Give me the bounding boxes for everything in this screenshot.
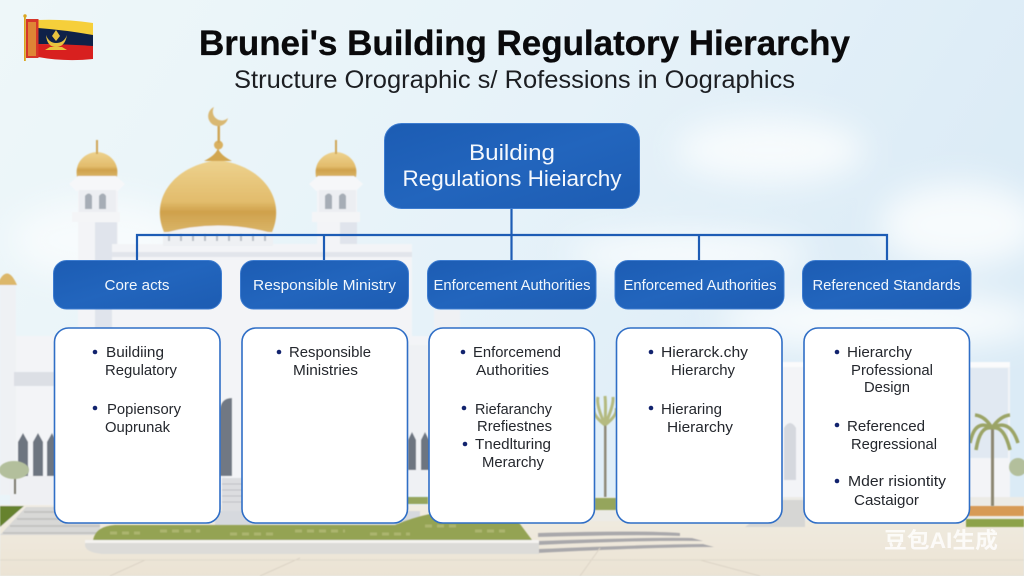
panel: core acts: Ouprunak [105,419,170,436]
panel: core acts: Popiensory [107,401,181,418]
panel: enforcement authorities: Authorities [476,362,549,379]
panel: core acts [54,328,220,523]
panel: core acts: Buildiing [106,344,164,361]
header: Core acts: Core acts [104,277,170,294]
root box: Building Regulations Hierarchy: Building [469,140,555,165]
right minaret top [309,140,363,222]
flag of Brunei [23,14,93,61]
watermark: 豆包AI生成 [884,528,998,553]
clouds [10,118,1024,350]
panel: referenced standards: Mder risiontity [848,473,947,490]
header: Referenced Standards: Referenced Standards [812,277,960,294]
header: Enforced Authorities: Enforcemed Authorities [624,277,776,294]
panel: enforced authorities: Hierarchy [671,362,735,379]
panel: referenced standards: Design [864,379,910,396]
panel: enforced authorities: Hierarchy [667,419,734,436]
subtitle: Structure Orographic s/ Rofessions in Oographics [234,66,795,94]
left minaret top [69,140,125,222]
header: Enforcement Authorities: Enforcement Authorities [434,277,590,294]
panel: enforcement authorities [429,328,594,523]
mosque building [0,190,1010,506]
header: Core acts [54,260,222,309]
panel: referenced standards: Castaigor [854,492,919,509]
panel: referenced standards: Referenced [847,418,925,435]
root box: Building Regulations Hierarchy: Regulations Hieiarchy [402,166,622,191]
panel: enforcement authorities: Merarchy [482,454,544,471]
header: Enforced Authorities [615,260,784,309]
panel: referenced standards [804,328,970,523]
root box: Building Regulations Hierarchy [384,124,640,208]
header: Referenced Standards [802,260,971,309]
header: Responsible Ministry: Responsible Ministry [253,277,397,294]
title: Brunei's Building Regulatory Hierarchy [199,24,851,63]
panel: core acts: Regulatory [105,362,177,379]
panel: responsible ministries: Ministries [293,362,358,379]
panel: enforced authorities: Hierarck.chy [661,344,749,361]
palm trees and small tree [0,396,1024,506]
hedge and planter [85,497,1024,554]
panel: referenced standards: Professional [851,362,933,379]
panel: enforced authorities: Hieraring [661,401,722,418]
panel: enforcement authorities: Riefaranchy [475,401,552,418]
golden main dome [160,107,276,233]
panel: enforced authorities [616,328,782,523]
header: Enforcement Authorities [428,260,596,309]
header: Responsible Ministry [240,260,408,309]
panel: enforcement authorities: Tnedlturing [475,436,551,453]
panel: referenced standards: Regressional [851,436,937,453]
connector lines [137,208,887,261]
panel: responsible ministries: Responsible [289,344,371,361]
panel: responsible ministries [242,328,408,523]
panel: enforcement authorities: Enforcemend [473,344,561,361]
panel: enforcement authorities: Rrefiestnes [477,418,552,435]
panel: referenced standards: Hierarchy [847,344,913,361]
plaza ground and steps [0,478,1024,576]
